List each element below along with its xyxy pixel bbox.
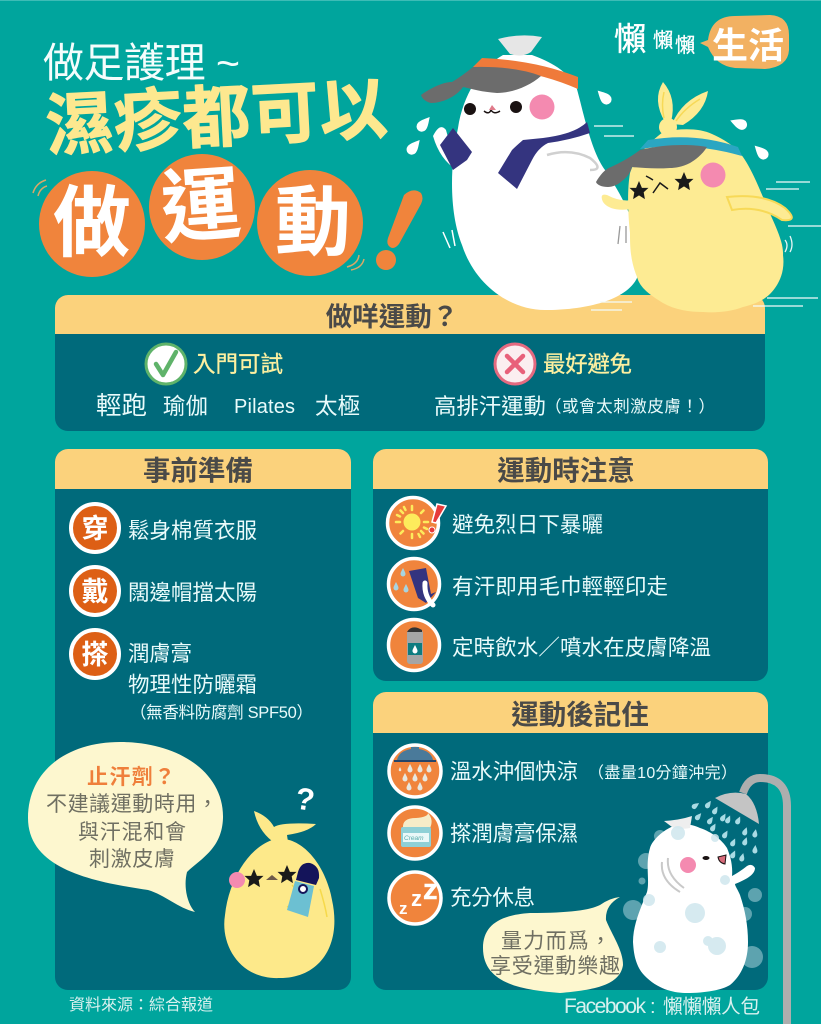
speed lines	[591, 126, 821, 310]
sweat drops	[728, 116, 748, 131]
text: rest: 充分休息	[450, 886, 535, 910]
icon: cream jar	[389, 807, 441, 859]
text: shower: 溫水沖個快涼	[450, 760, 578, 784]
towel outline	[547, 152, 598, 170]
speech bubble: antiperspirant: 與汗混和會	[78, 821, 186, 844]
item: hat: 戴	[82, 577, 108, 607]
speech bubble: antiperspirant: 不建議運動時用，	[46, 793, 218, 816]
text: drink water: 定時飲水／噴水在皮膚降溫	[452, 636, 711, 660]
heading: what exercise: 做咩運動？	[326, 302, 458, 332]
speech bubble: antiperspirant: 刺激皮膚	[89, 848, 175, 871]
arms	[602, 195, 632, 210]
list: recommended exercises	[96, 392, 360, 420]
label: try: 入門可試	[193, 352, 283, 377]
item: hat: 闊邊帽擋太陽	[128, 581, 257, 605]
item: apply: 搽	[82, 640, 108, 670]
text: moisturise: 搽潤膚膏保濕	[450, 822, 578, 846]
title: orange circles 做運動: 運	[158, 159, 244, 254]
headband	[640, 137, 742, 156]
speech bubble: antiperspirant: 止汗劑？	[87, 765, 175, 789]
item: apply: （無香料防腐劑 SPF50）	[130, 703, 313, 722]
icon: zzz: z	[399, 899, 408, 918]
logo: 懶懶懶生活: 懶	[614, 21, 646, 57]
logo: 懶懶懶生活	[614, 15, 789, 69]
panel: during exercise	[373, 449, 768, 681]
face	[630, 181, 648, 199]
speech bubble: antiperspirant	[28, 742, 223, 912]
sweat drops	[594, 87, 614, 107]
logo: 懶懶懶生活: 懶	[675, 34, 695, 57]
panel header: during exercise	[373, 449, 768, 489]
icon: shower head	[389, 745, 441, 797]
arm	[433, 127, 457, 170]
icon: cream jar: Cream	[404, 835, 424, 842]
icon: towel	[388, 558, 440, 610]
facebook note	[564, 995, 760, 1018]
character: yellow with antiperspirant	[224, 781, 334, 978]
item: apply: 潤膚膏	[128, 642, 192, 666]
panel header: what exercise	[55, 295, 765, 334]
icon: zzz	[389, 872, 441, 924]
character: white with cap and towel	[404, 35, 640, 310]
text: exercises to avoid	[434, 394, 715, 419]
speech bubble: do what you can	[483, 897, 623, 993]
text: exercises to avoid: 高排汗運動	[434, 394, 546, 419]
cap	[596, 145, 707, 187]
item: apply: 物理性防曬霜	[128, 673, 257, 697]
heading: during exercise: 運動時注意	[497, 455, 635, 486]
heading: after exercise: 運動後記住	[511, 699, 649, 730]
cap	[421, 67, 541, 103]
speech bubble: do what you can: 享受運動樂趣	[490, 955, 620, 978]
icon: zzz: z	[411, 886, 422, 911]
label: avoid: 最好避免	[543, 352, 632, 377]
title: orange circles 做運動: 動	[275, 181, 351, 266]
title: first line: 做足護理 ~	[43, 40, 240, 86]
logo: 懶懶懶生活: 生活	[712, 25, 784, 66]
item: apply	[71, 630, 313, 722]
icon: sun	[388, 498, 446, 548]
text: shower note: （盡量10分鐘沖完）	[588, 764, 737, 782]
shower pipe and head	[691, 778, 787, 1024]
text: towel: 有汗即用毛巾輕輕印走	[452, 575, 668, 599]
text: exercises to avoid: （或會太刺激皮膚！）	[545, 397, 715, 416]
title: orange circles 做運動	[33, 154, 364, 277]
panel header: preparation	[55, 449, 351, 489]
title: second line: 濕疹都可以	[44, 71, 389, 165]
icon: exclamation mark	[376, 190, 422, 270]
icon: bottle	[388, 620, 440, 670]
face	[464, 103, 476, 115]
list: recommended exercises: 瑜伽	[163, 394, 208, 419]
headband	[473, 58, 578, 89]
panel: after exercise	[373, 692, 768, 990]
character: white showering	[623, 816, 763, 993]
icon: question mark: ?	[293, 781, 317, 818]
list: recommended exercises: 太極	[315, 394, 360, 419]
item: wear	[71, 504, 257, 552]
facebook note: 懶懶懶人包	[663, 996, 760, 1018]
panel: preparation	[55, 449, 351, 990]
text: avoid sun: 避免烈日下暴曬	[452, 513, 603, 537]
ears	[658, 82, 708, 125]
item: wear: 穿	[82, 514, 108, 544]
list: recommended exercises: 輕跑	[96, 392, 147, 420]
water bottle cap	[498, 35, 542, 56]
list: recommended exercises: Pilates	[234, 396, 295, 418]
icon: check	[146, 344, 186, 384]
icon: cross	[495, 344, 535, 384]
source note: 資料來源：綜合報道	[69, 996, 213, 1014]
item: hat	[71, 567, 257, 615]
title: orange circles 做運動: 做	[53, 179, 131, 267]
heading: preparation: 事前準備	[143, 455, 253, 486]
facebook note: Facebook	[564, 995, 646, 1018]
speech bubble: do what you can: 量力而爲，	[501, 930, 611, 953]
character: yellow with cap	[596, 82, 792, 312]
icon: zzz: z	[423, 874, 438, 906]
scarf	[440, 122, 590, 189]
item: wear: 鬆身棉質衣服	[128, 519, 257, 543]
logo: 懶懶懶生活: 懶	[653, 29, 673, 52]
panel header: after exercise	[373, 692, 768, 733]
facebook note: :	[650, 996, 656, 1018]
panel: what exercise	[55, 295, 765, 431]
